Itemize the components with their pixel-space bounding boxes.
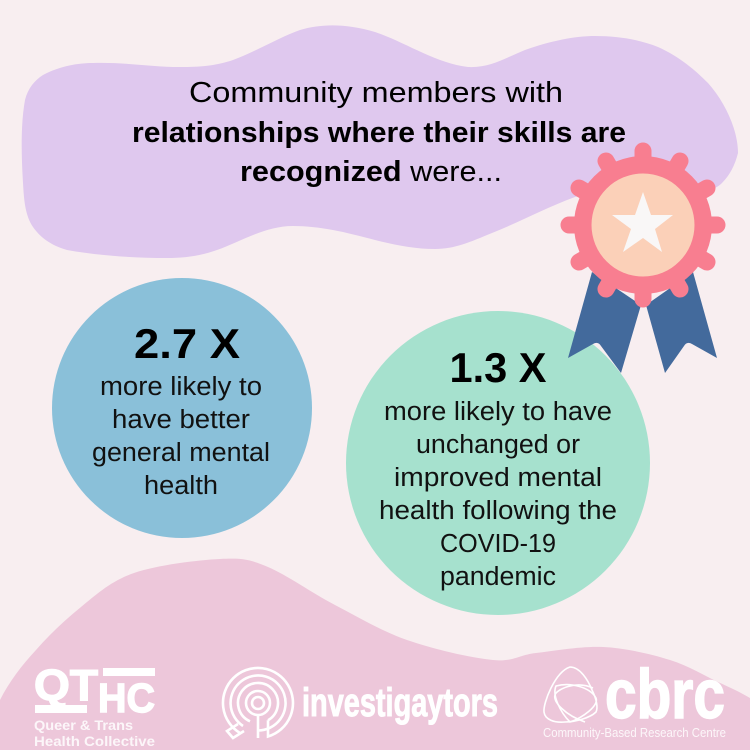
stat description: health [144,472,218,500]
medal ribbons [568,272,717,373]
stat description: more likely to have [384,398,612,426]
panel: pink footer blob [0,559,750,750]
wordmark: investigaytors [302,681,498,725]
heading text: recognized were... [240,156,502,188]
logo: cbrc [543,655,726,740]
medal centre [592,174,694,276]
stat description: improved mental [394,464,602,492]
stat description [379,398,617,591]
stat description: health following the [379,497,617,525]
stat description: more likely to [100,373,262,401]
stat description: unchanged or [416,431,581,459]
medal rosette [569,151,717,299]
heading text: Community members with [189,77,563,109]
logo: investigaytors [223,668,498,738]
logo: QTHC: HC [98,675,155,721]
logo caption: Queer & Trans [34,717,133,733]
logo caption: Community-Based Research Centre [543,725,726,740]
panel: green stat circle [346,311,650,615]
stat description: general mental [92,439,270,467]
panel: blue stat circle [52,278,312,538]
logo: QTHC: Health Collective [34,733,155,749]
heading text [132,77,626,188]
medal star [612,192,673,252]
stat description [92,373,270,500]
panel: purple heading blob [22,25,738,258]
stat description: have better [112,406,251,434]
stat: 2.7 X: 2.7 X [134,320,240,367]
spiral target mark [223,668,293,738]
icon: award medal [568,151,717,373]
logo: QTHC [34,661,155,749]
stat description: COVID-19 [440,530,556,558]
logo: QTHC: QT [34,661,98,710]
stat description: pandemic [440,563,556,591]
stat: 1.3 X: 1.3 X [450,344,546,391]
wordmark: cbrc [605,655,725,733]
knot mark [544,667,597,722]
heading text: relationships where their skills are [132,117,626,149]
